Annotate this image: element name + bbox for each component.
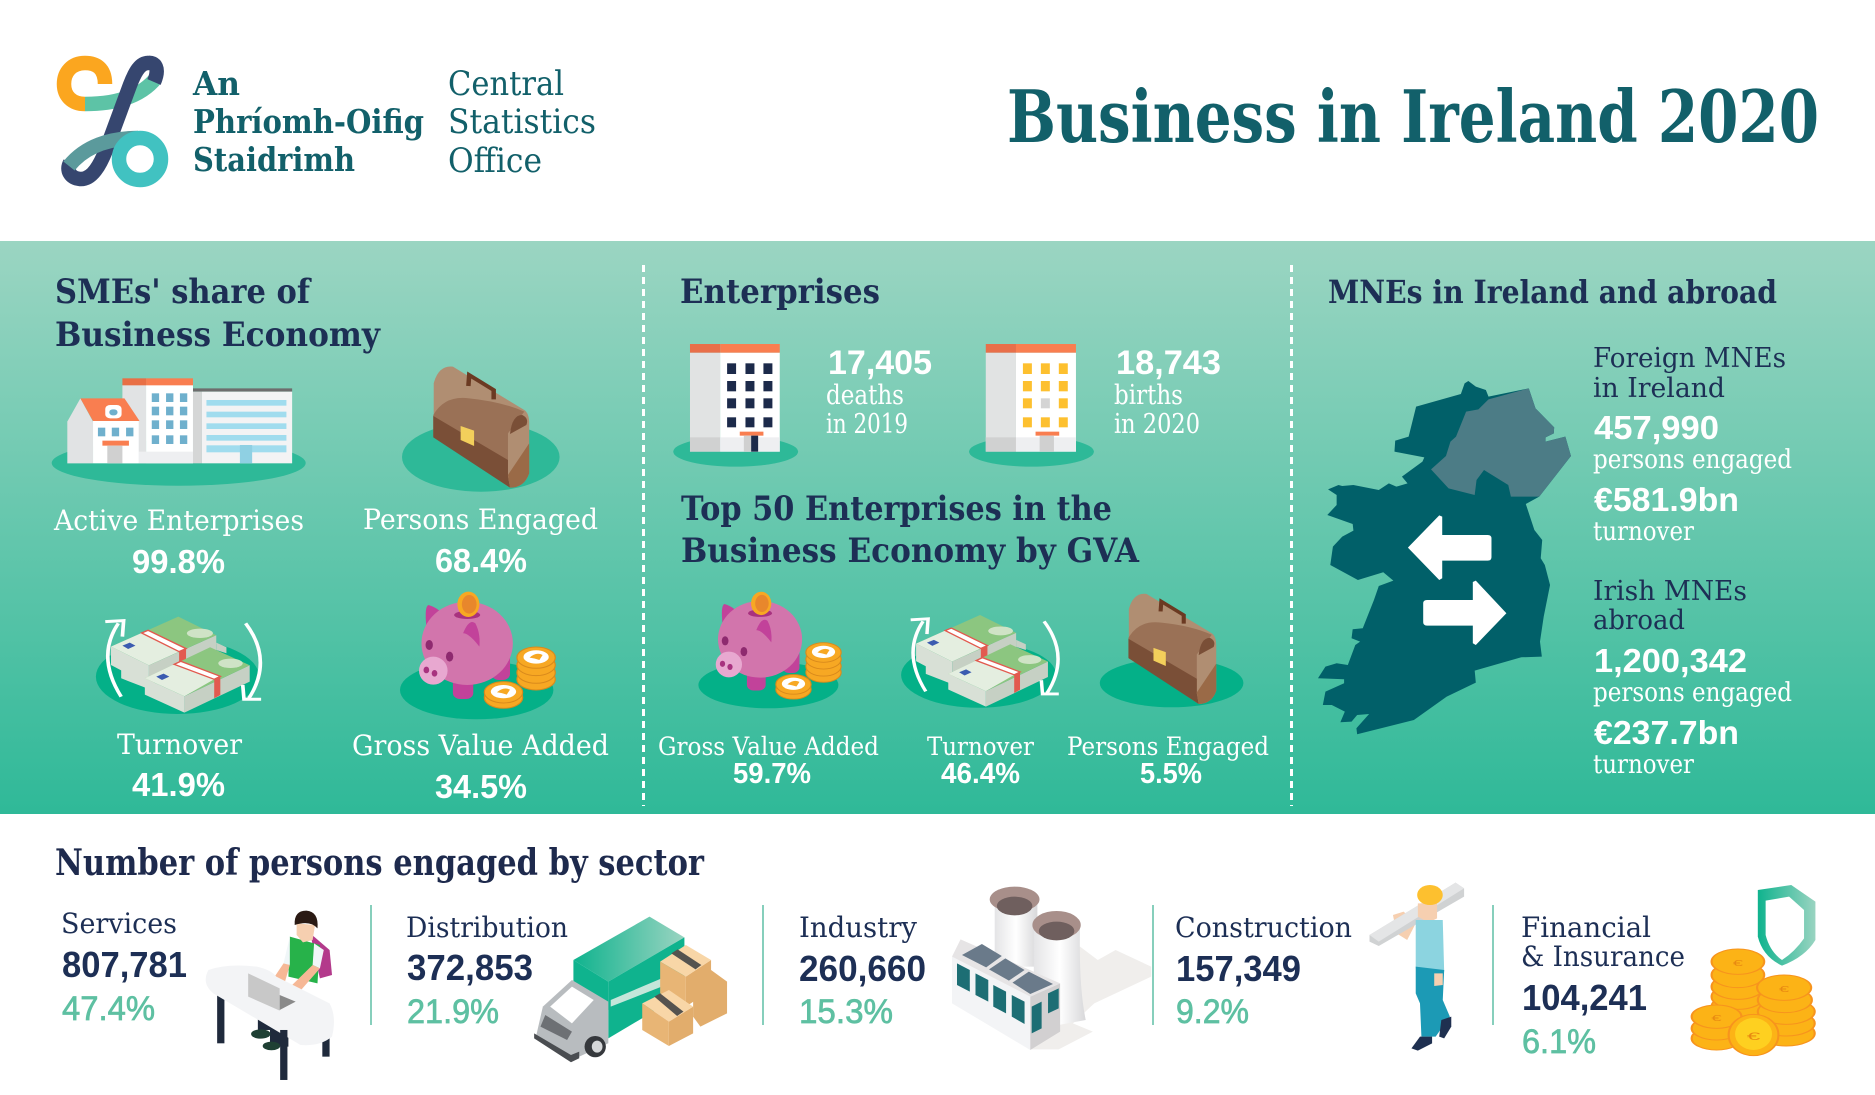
stat: 18,743 births in 2020: in 2020 bbox=[1114, 409, 1200, 440]
logo text: English name: Statistics bbox=[448, 102, 596, 142]
stat: 18,743 births in 2020: births bbox=[1114, 380, 1183, 411]
stat: Distribution: Distribution bbox=[406, 911, 568, 944]
stat: Gross Value Added: 34.5% bbox=[435, 768, 527, 805]
stat: Financial & Insurance: 104,241 bbox=[1522, 977, 1647, 1018]
text block: Irish MNEs abroad: Irish MNEs bbox=[1593, 576, 1747, 607]
logo text: Irish name: An bbox=[192, 64, 240, 103]
text block: Foreign MNEs in Ireland bbox=[1593, 343, 1792, 547]
stat: Services: 807,781 bbox=[62, 944, 187, 985]
logo text: Irish name bbox=[192, 64, 424, 179]
stat: Gross Value Added bbox=[352, 729, 609, 805]
stat: Construction bbox=[1175, 911, 1352, 1031]
stat: Turnover: 41.9% bbox=[132, 766, 225, 803]
icon: factory with cooling towers bbox=[952, 887, 1151, 1050]
text block: Foreign MNEs in Ireland: €581.9bn bbox=[1594, 481, 1739, 518]
panel: MNEs in Ireland and abroad bbox=[1318, 273, 1792, 780]
stat: Persons Engaged: 5.5% bbox=[1140, 758, 1202, 790]
heading: SMEs' share: SMEs' share of bbox=[55, 272, 312, 312]
text block: Foreign MNEs in Ireland: persons engaged bbox=[1593, 445, 1792, 475]
text block: Irish MNEs abroad: €237.7bn bbox=[1594, 714, 1739, 751]
text block: Foreign MNEs in Ireland: turnover bbox=[1593, 517, 1694, 547]
stat: Persons Engaged bbox=[363, 503, 598, 579]
icon: building with lit windows bbox=[969, 344, 1094, 467]
icon: briefcase bbox=[402, 367, 560, 492]
heading: Top 50 Enterprises: Top 50 Enterprises in the bbox=[681, 489, 1112, 529]
heading: sector: Number of persons engaged by sector bbox=[55, 842, 705, 884]
stat: Services: Services bbox=[61, 907, 177, 940]
heading: Enterprises: Enterprises bbox=[680, 272, 880, 312]
stat: Persons Engaged: Persons Engaged bbox=[363, 503, 598, 536]
text block: Foreign MNEs in Ireland: Foreign MNEs bbox=[1593, 343, 1786, 374]
heading: Top 50 Enterprises bbox=[681, 489, 1140, 571]
icon: CSO logo mark bbox=[64, 63, 161, 180]
icon: buildings bbox=[52, 378, 306, 486]
text block: Irish MNEs abroad: persons engaged bbox=[1593, 678, 1792, 708]
text block: Foreign MNEs in Ireland: in Ireland bbox=[1593, 373, 1725, 404]
icon: shield and euro coins bbox=[1692, 885, 1815, 1056]
heading: MNEs: MNEs in Ireland and abroad bbox=[1328, 273, 1777, 311]
logo text: English name bbox=[448, 64, 596, 181]
stat: Turnover: Turnover bbox=[117, 728, 243, 761]
icon: banknotes with arrows bbox=[96, 617, 261, 714]
stat: Construction: 157,349 bbox=[1176, 948, 1301, 989]
heading: SMEs' share bbox=[55, 272, 381, 355]
stat: Financial & Insurance: & Insurance bbox=[1521, 940, 1685, 973]
header logo bbox=[64, 63, 596, 181]
stat: Construction: Construction bbox=[1175, 911, 1352, 944]
stat: Gross Value Added: 59.7% bbox=[733, 758, 811, 790]
stat: Gross Value Added: Gross Value Added bbox=[352, 729, 609, 762]
stat: Turnover bbox=[927, 732, 1034, 790]
stat: Turnover bbox=[117, 728, 243, 803]
stat: 17,405 deaths in 2019 bbox=[826, 344, 932, 440]
stat: Active Enterprises bbox=[53, 504, 304, 580]
stat: Distribution: 372,853 bbox=[407, 947, 533, 988]
stat: Persons Engaged: Persons Engaged bbox=[1067, 732, 1269, 761]
stat: 17,405 deaths in 2019: 17,405 bbox=[828, 344, 932, 382]
stat: Industry: 260,660 bbox=[799, 948, 926, 989]
icon: banknotes with arrows bbox=[901, 615, 1059, 708]
icon: shield and euro coins: € bbox=[1747, 1030, 1761, 1043]
heading: SMEs' share: Business Economy bbox=[55, 315, 381, 355]
stat: Industry: Industry bbox=[799, 911, 917, 944]
teal gradient band bbox=[0, 241, 1875, 814]
icon: construction worker bbox=[1369, 883, 1464, 1051]
logo text: Irish name: Phríomh-Oifig bbox=[193, 102, 424, 141]
stat: Industry: 15.3% bbox=[799, 993, 893, 1031]
stat: Industry bbox=[799, 911, 926, 1031]
icon: shield and euro coins: € bbox=[1711, 1014, 1722, 1023]
stat: Active Enterprises: 99.8% bbox=[132, 543, 225, 580]
map of Ireland with arrows bbox=[1318, 381, 1571, 734]
icon: delivery truck with boxes bbox=[534, 917, 727, 1062]
stat: Services bbox=[61, 907, 187, 1028]
stat: 18,743 births in 2020 bbox=[1114, 344, 1221, 440]
text block: Irish MNEs abroad: turnover bbox=[1593, 750, 1694, 780]
panel: SMEs' share of Business Economy bbox=[52, 272, 609, 805]
stat: Construction: 9.2% bbox=[1176, 993, 1249, 1031]
icon: briefcase bbox=[1100, 594, 1243, 707]
stat: Financial & Insurance: Financial bbox=[1521, 911, 1651, 944]
panel: Number of persons engaged by sector bbox=[55, 842, 1815, 1080]
stat: Services: 47.4% bbox=[62, 990, 155, 1028]
icon: piggy bank bbox=[400, 592, 555, 719]
icon: shield and euro coins: € bbox=[1779, 985, 1789, 994]
stat: Financial & Insurance: 6.1% bbox=[1522, 1023, 1596, 1061]
stat: Financial & Insurance bbox=[1521, 911, 1685, 1061]
logo text: English name: Office bbox=[448, 141, 542, 181]
stat: Persons Engaged: 68.4% bbox=[435, 542, 527, 579]
stat: Active Enterprises: Active Enterprises bbox=[53, 504, 304, 537]
heading: Top 50 Enterprises: Business Economy by GVA bbox=[681, 531, 1140, 571]
icon: building with dark windows bbox=[673, 344, 798, 467]
stat: Turnover: Turnover bbox=[927, 732, 1034, 761]
panel: Enterprises bbox=[658, 272, 1269, 790]
text block: Irish MNEs abroad: abroad bbox=[1593, 605, 1685, 636]
stat: Distribution: 21.9% bbox=[407, 993, 499, 1031]
icon: person at desk bbox=[206, 911, 334, 1080]
text block: Irish MNEs abroad: 1,200,342 bbox=[1594, 642, 1747, 679]
icon: piggy bank bbox=[698, 592, 841, 708]
text block: Foreign MNEs in Ireland: 457,990 bbox=[1594, 409, 1719, 446]
icon: shield and euro coins: € bbox=[1733, 959, 1743, 968]
stat: Distribution bbox=[406, 911, 568, 1031]
logo text: English name: Central bbox=[448, 64, 564, 104]
stat: Persons Engaged bbox=[1067, 732, 1269, 790]
stat: Turnover: 46.4% bbox=[941, 758, 1020, 790]
stat: 18,743 births in 2020: 18,743 bbox=[1116, 344, 1221, 382]
stat: 17,405 deaths in 2019: deaths bbox=[826, 380, 904, 411]
stat: Gross Value Added: Gross Value Added bbox=[658, 732, 879, 761]
stat: Gross Value Added bbox=[658, 732, 879, 790]
stat: 17,405 deaths in 2019: in 2019 bbox=[826, 409, 908, 440]
logo text: Irish name: Staidrimh bbox=[193, 140, 355, 179]
text block: Irish MNEs abroad bbox=[1593, 576, 1792, 780]
